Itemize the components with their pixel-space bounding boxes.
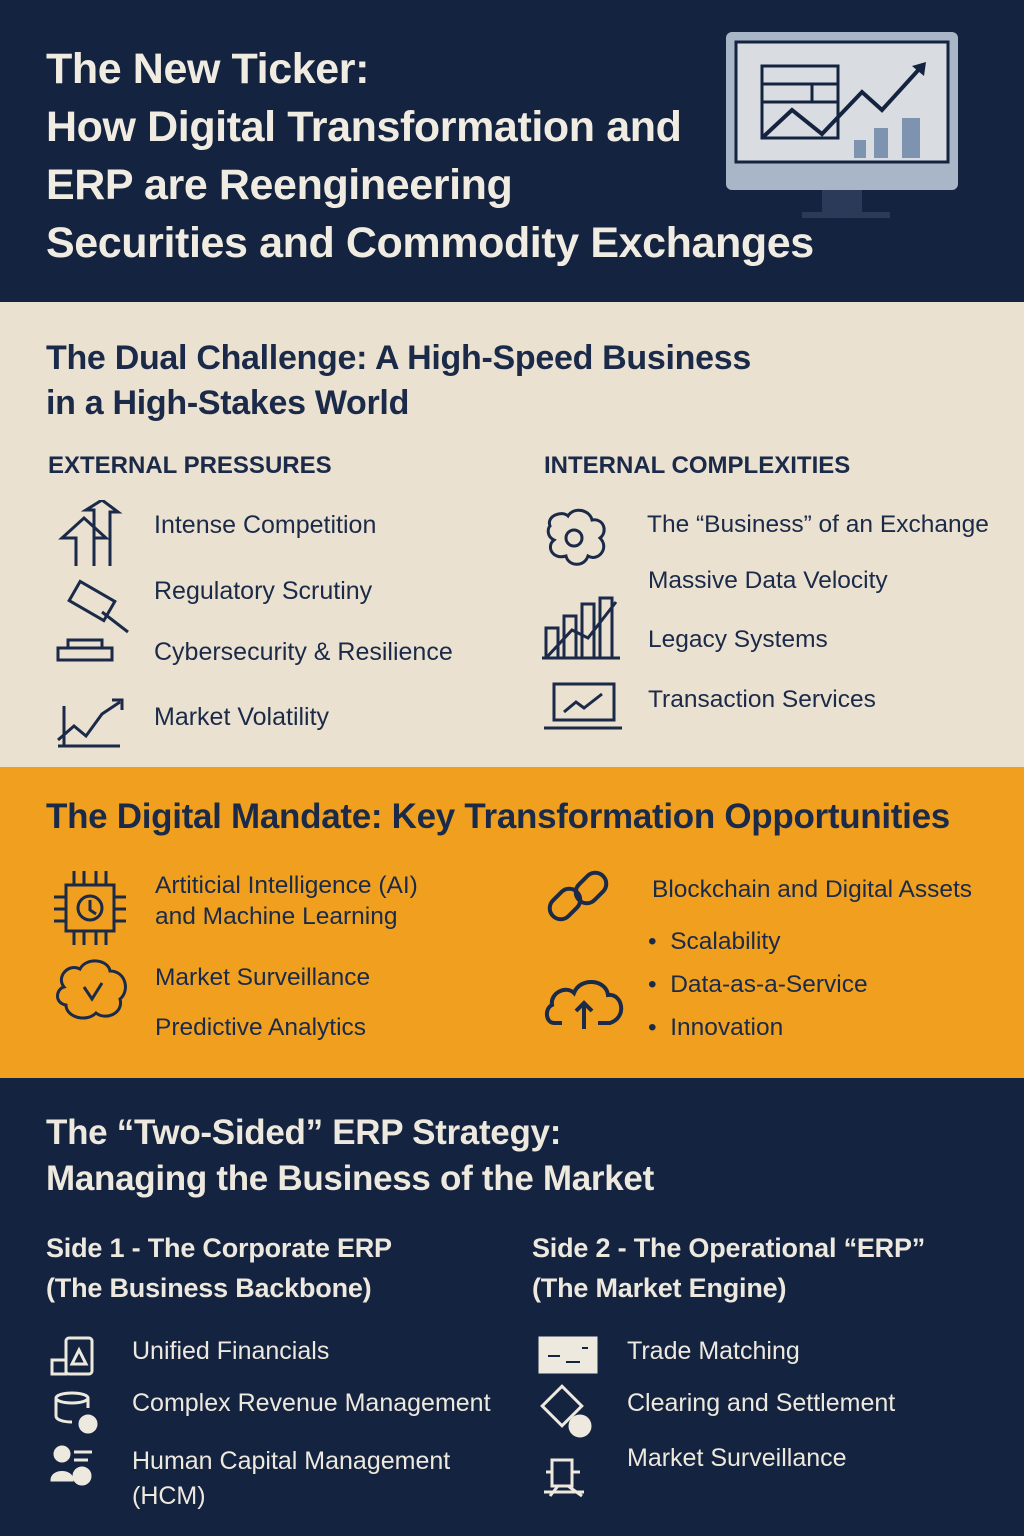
- column: blockchain and cloud: [544, 870, 972, 1041]
- panel: dual challenge: [0, 302, 1024, 767]
- column: internal complexities: [542, 452, 989, 730]
- column: external pressures: EXTERNAL PRESSURES: [48, 452, 332, 479]
- column: external pressures: Cybersecurity & Resilience: [154, 638, 453, 666]
- title: The New Ticker:: [46, 45, 369, 93]
- column: AI opportunities: Market Surveillance: [155, 964, 370, 991]
- column: external pressures: Market Volatility: [154, 703, 329, 731]
- panel: digital mandate: [0, 767, 1024, 1078]
- title: How Digital Transformation and: [46, 103, 681, 151]
- panel: two-sided ERP strategy: [0, 1078, 1024, 1536]
- title: ERP are Reengineering: [46, 161, 512, 209]
- column: AI opportunities: [54, 871, 418, 1041]
- column: side 1 corporate ERP: Side 1 - The Corporate ERP: [46, 1233, 392, 1263]
- column: blockchain and cloud: • Scalability: [648, 928, 780, 955]
- column: AI opportunities: and Machine Learning: [155, 903, 397, 930]
- column: side 2 operational ERP: Clearing and Settlement: [627, 1389, 895, 1417]
- column: blockchain and cloud: • Data-as-a-Service: [648, 971, 868, 998]
- column: side 2 operational ERP: [532, 1233, 925, 1498]
- header panel: [0, 0, 1024, 302]
- heading: digital mandate: The Digital Mandate: Key Transformation Opportunities: [46, 797, 950, 836]
- column: side 2 operational ERP: Market Surveillance: [627, 1444, 847, 1472]
- column: internal complexities: Transaction Services: [648, 686, 876, 713]
- column: AI opportunities: Predictive Analytics: [155, 1014, 366, 1041]
- column: side 1 corporate ERP: Unified Financials: [132, 1337, 329, 1365]
- column: side 1 corporate ERP: [46, 1233, 491, 1510]
- column: side 1 corporate ERP: Human Capital Management: [132, 1447, 450, 1475]
- column: internal complexities: Legacy Systems: [648, 626, 828, 653]
- heading: ERP strategy: The “Two-Sided” ERP Strategy:: [46, 1113, 561, 1152]
- column: side 1 corporate ERP: (The Business Backbone): [46, 1273, 371, 1303]
- heading: dual challenge: [46, 339, 751, 422]
- heading: ERP strategy: [46, 1113, 654, 1198]
- column: side 2 operational ERP: (The Market Engine): [532, 1273, 786, 1303]
- column: side 2 operational ERP: Trade Matching: [627, 1337, 800, 1365]
- column: external pressures: Intense Competition: [154, 511, 376, 539]
- heading: ERP strategy: Managing the Business of the Market: [46, 1159, 654, 1198]
- column: AI opportunities: Artiticial Intelligence (AI): [155, 872, 418, 899]
- column: blockchain and cloud: • Innovation: [648, 1014, 783, 1041]
- column: internal complexities: The “Business” of an Exchange: [647, 511, 989, 538]
- column: blockchain and cloud: Blockchain and Digital Assets: [652, 876, 972, 903]
- column: external pressures: [48, 452, 453, 748]
- column: internal complexities: INTERNAL COMPLEXITIES: [544, 452, 850, 479]
- heading: dual challenge: in a High-Stakes World: [46, 384, 409, 422]
- column: side 1 corporate ERP: (HCM): [132, 1482, 206, 1510]
- icon: monitor with chart: [726, 32, 958, 218]
- column: side 2 operational ERP: Side 2 - The Operational “ERP”: [532, 1233, 925, 1263]
- column: internal complexities: Massive Data Velocity: [648, 567, 888, 594]
- heading: dual challenge: The Dual Challenge: A High-Speed Business: [46, 339, 751, 377]
- column: external pressures: Regulatory Scrutiny: [154, 577, 372, 605]
- title: [46, 45, 814, 267]
- title: Securities and Commodity Exchanges: [46, 219, 814, 267]
- column: side 1 corporate ERP: Complex Revenue Management: [132, 1389, 491, 1417]
